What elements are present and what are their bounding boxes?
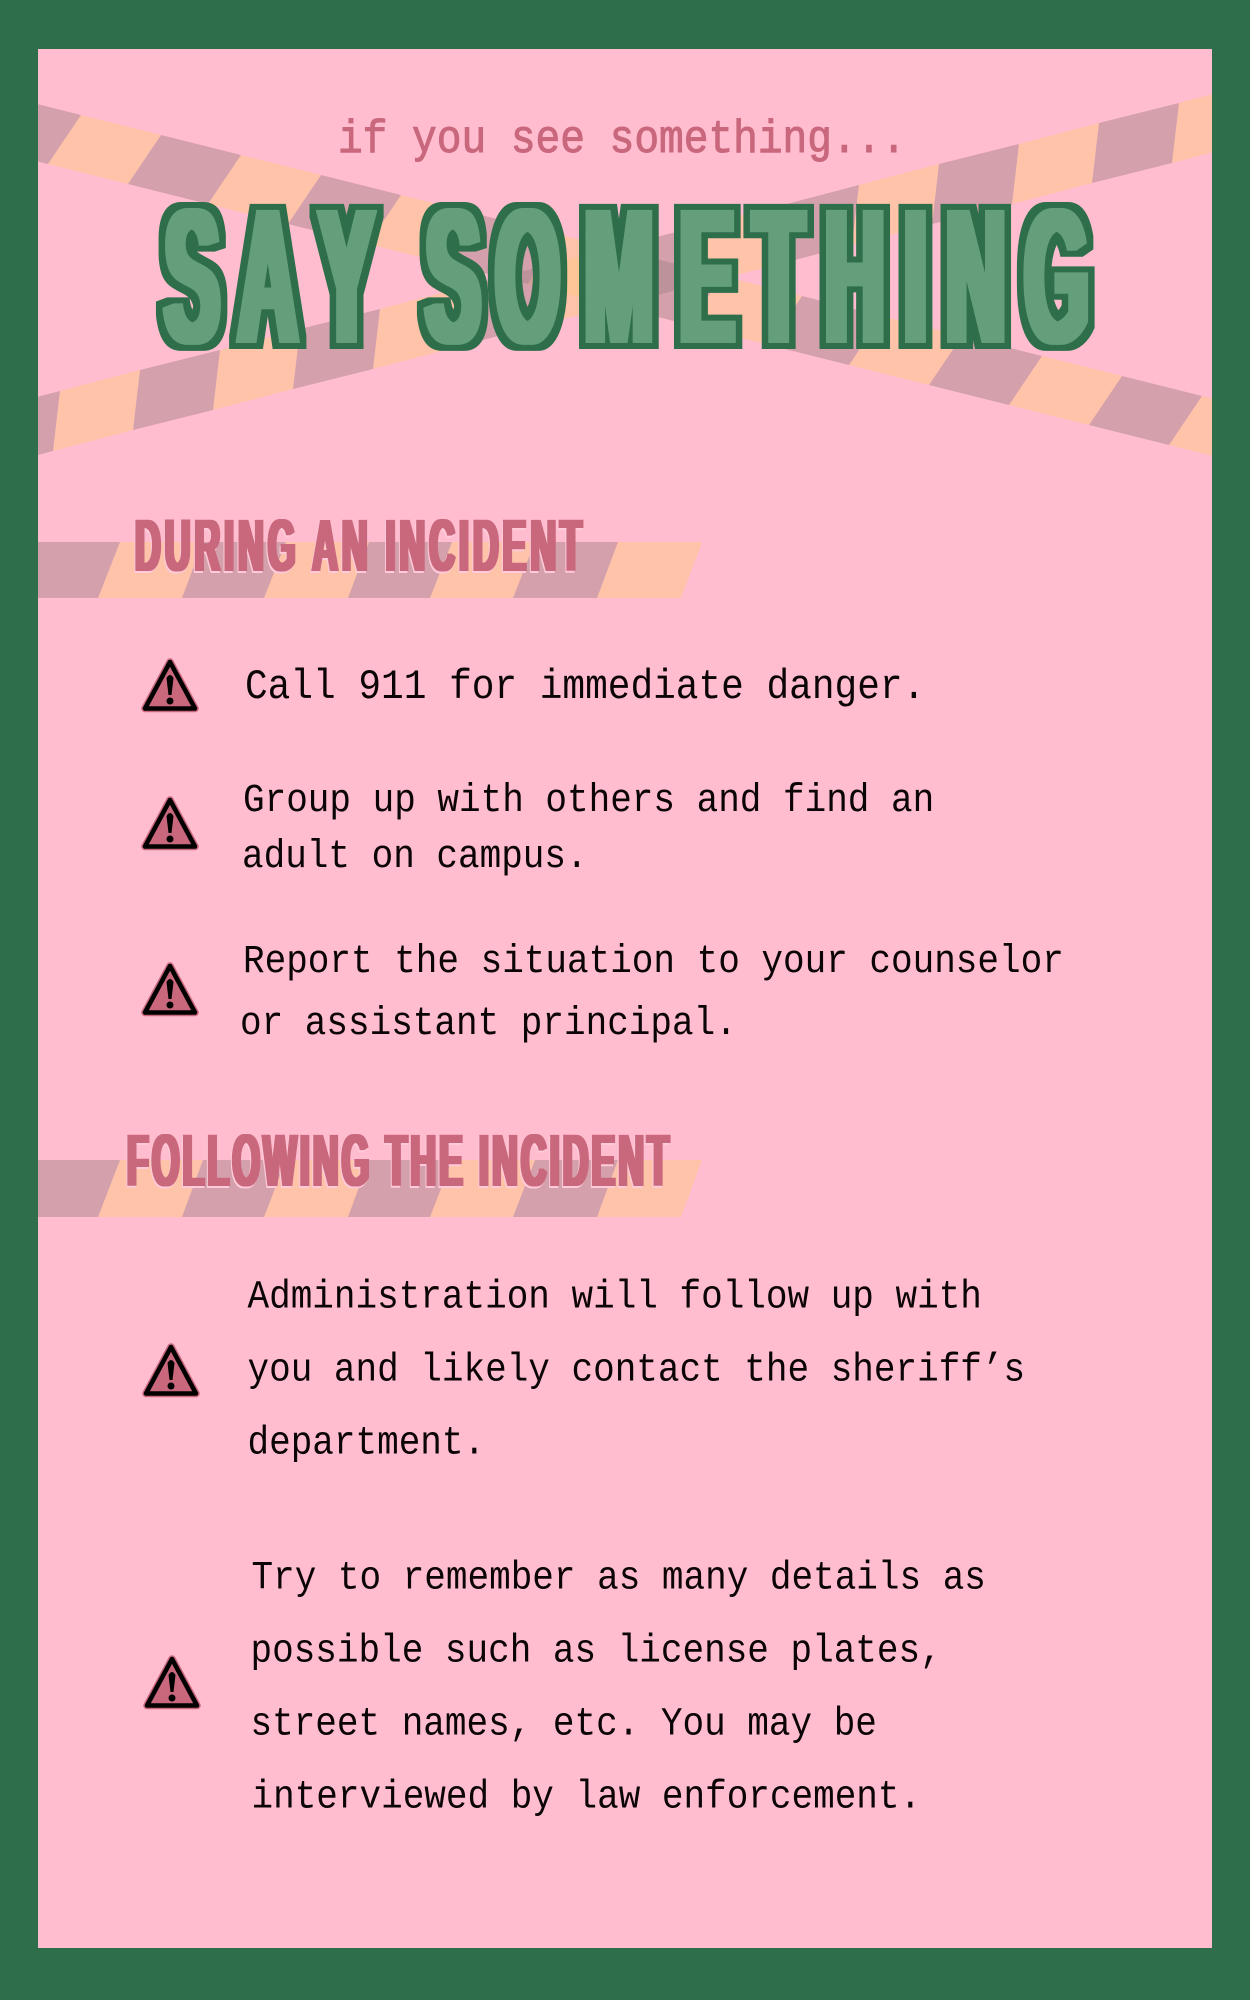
heading: during an incident: DURING AN INCIDENT bbox=[135, 505, 582, 588]
crossed caution tape bbox=[38, 94, 1212, 456]
icon: warning 3 bbox=[145, 966, 195, 1012]
text: remember details: street names, etc. You may be bbox=[250, 1702, 877, 1747]
text: call 911: Call 911 for immediate danger. bbox=[245, 663, 925, 711]
text: group up bbox=[242, 778, 934, 880]
text: report bbox=[240, 939, 1064, 1047]
text: administration: department. bbox=[248, 1421, 485, 1466]
text: group up: adult on campus. bbox=[242, 834, 588, 880]
text: administration bbox=[248, 1275, 1025, 1466]
text: remember details: Try to remember as many details as bbox=[252, 1556, 986, 1601]
text: remember details: possible such as license plates, bbox=[250, 1629, 942, 1674]
icon: warning 2 bbox=[145, 800, 195, 846]
heading: following the incident: FOLLOWING THE INCIDENT bbox=[127, 1120, 669, 1203]
icon: warning 4 bbox=[146, 1347, 196, 1394]
text: report: Report the situation to your counselor bbox=[243, 939, 1064, 985]
icon: warning 5 bbox=[147, 1659, 197, 1706]
text: remember details: interviewed by law enforcement. bbox=[252, 1775, 921, 1820]
section 1 tape bbox=[38, 542, 702, 598]
icon: warning 1 bbox=[145, 662, 195, 708]
text: administration: Administration will follow up with bbox=[248, 1275, 982, 1320]
text: administration: you and likely contact the sheriff’s bbox=[248, 1348, 1025, 1393]
title: SAY SOMETHING bbox=[165, 170, 1089, 384]
text: report: or assistant principal. bbox=[240, 1001, 737, 1047]
text: group up: Group up with others and find an bbox=[243, 778, 934, 824]
text: remember details bbox=[250, 1556, 986, 1820]
section 2 tape bbox=[38, 1160, 702, 1217]
subtitle: if you see something... bbox=[338, 115, 906, 167]
